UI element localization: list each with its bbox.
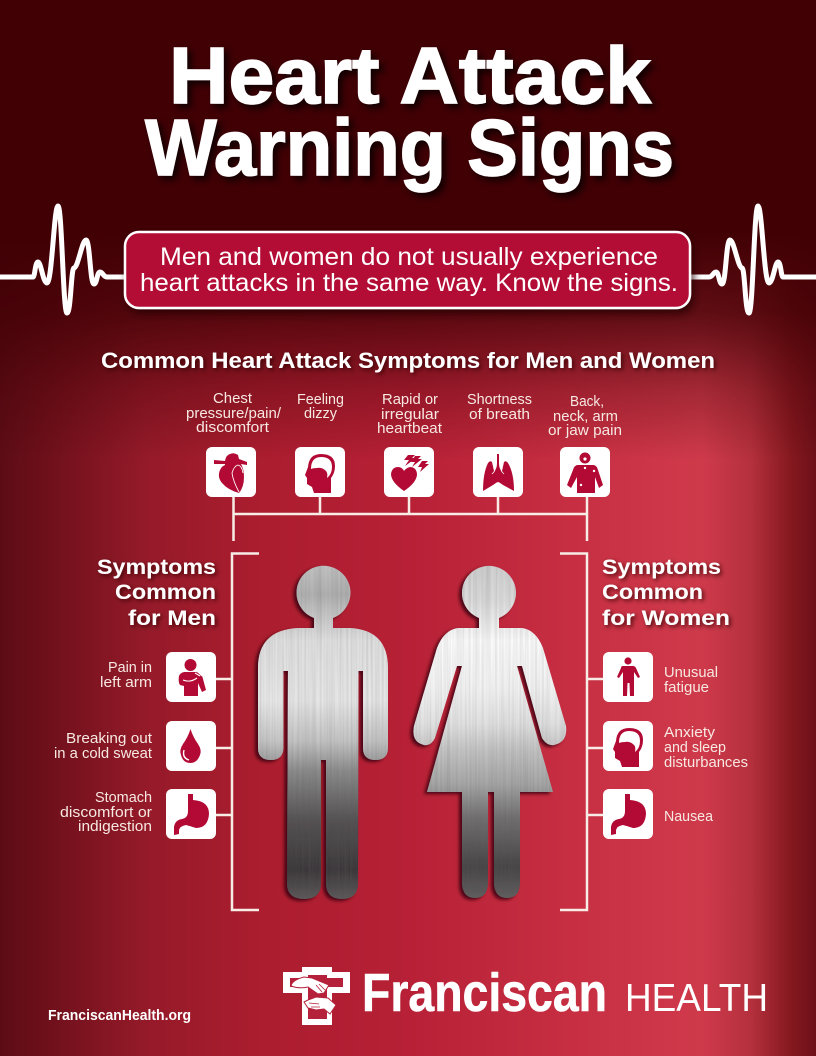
heading: symptoms for men: for Men [128,607,216,630]
women symptom labels: Unusual [664,664,718,681]
heading: symptoms for women: Symptoms [602,556,721,579]
logo: cross with hands [283,967,350,1025]
women symptom labels: and sleep [664,739,726,756]
icon: stomach women [603,789,653,839]
website: FranciscanHealth.org [48,1008,191,1024]
icon: head dizzy [295,447,345,497]
banner: Men and women do not usually experience [160,243,658,271]
common symptom labels: pressure/pain/ [186,405,282,422]
icon: back neck arm jaw body [560,447,610,497]
common symptom labels: Chest [213,390,253,407]
heartbeat line: left [0,206,125,313]
men symptom labels [54,659,153,835]
women symptom labels: Anxiety [664,724,716,741]
logo: Franciscan Health wordmark: Franciscan [362,963,607,1023]
common symptom labels: or jaw pain [548,422,622,439]
common symptom labels: heartbeat [377,420,443,437]
heading: common symptoms: Common Heart Attack Symptoms for Men and Women [101,348,715,373]
common symptom labels: dizzy [304,405,337,422]
women symptom labels: Nausea [664,808,714,825]
icon: stomach men [166,789,216,839]
icon: sweat drop [166,721,216,771]
heading: symptoms for women: Common [602,581,703,604]
common symptom labels: Rapid or [382,391,438,408]
common symptom labels: irregular [381,406,439,423]
common symptom labels: discomfort [196,419,270,436]
men symptom labels: discomfort or [60,804,152,821]
common symptom labels [186,390,622,439]
connector lines [216,497,603,910]
title: Heart Attack [169,31,652,120]
women symptom labels [664,664,748,825]
heading: symptoms for women [602,556,730,630]
common symptom labels: neck, arm [553,408,618,425]
figure: woman [413,566,566,898]
men symptom labels: in a cold sweat [54,745,153,762]
icon: chest heart [206,447,256,497]
heading: symptoms for men [97,556,216,630]
icon: anxiety head [603,721,653,771]
figure: man [258,566,388,899]
women symptom labels: disturbances [664,754,748,771]
banner [125,232,690,308]
heartbeat line: right [690,206,816,313]
common symptom labels: Shortness [467,391,532,408]
icon: fatigue figure [603,652,653,702]
common symptom labels: of breath [469,406,530,423]
men symptom labels: left arm [100,674,152,691]
common symptom labels: Back, [570,393,604,410]
women symptom labels: fatigue [664,679,709,696]
men symptom labels: Pain in [108,659,152,676]
common symptom labels: Feeling [297,391,344,408]
icon: lungs [473,447,523,497]
men symptom labels: Stomach [95,789,152,806]
logo: Franciscan Health wordmark: HEALTH [625,977,768,1020]
icon: pain in left arm [166,652,216,702]
heading: symptoms for men: Common [115,581,216,604]
title: Warning Signs [145,103,674,192]
men symptom labels: Breaking out [66,730,153,747]
heading: symptoms for women: for Women [602,607,730,630]
heading: symptoms for men: Symptoms [97,556,216,579]
men symptom labels: indigestion [78,818,152,835]
banner: heart attacks in the same way. Know the signs. [140,269,678,297]
icon: heart with bolts [384,447,434,497]
title [145,31,674,192]
